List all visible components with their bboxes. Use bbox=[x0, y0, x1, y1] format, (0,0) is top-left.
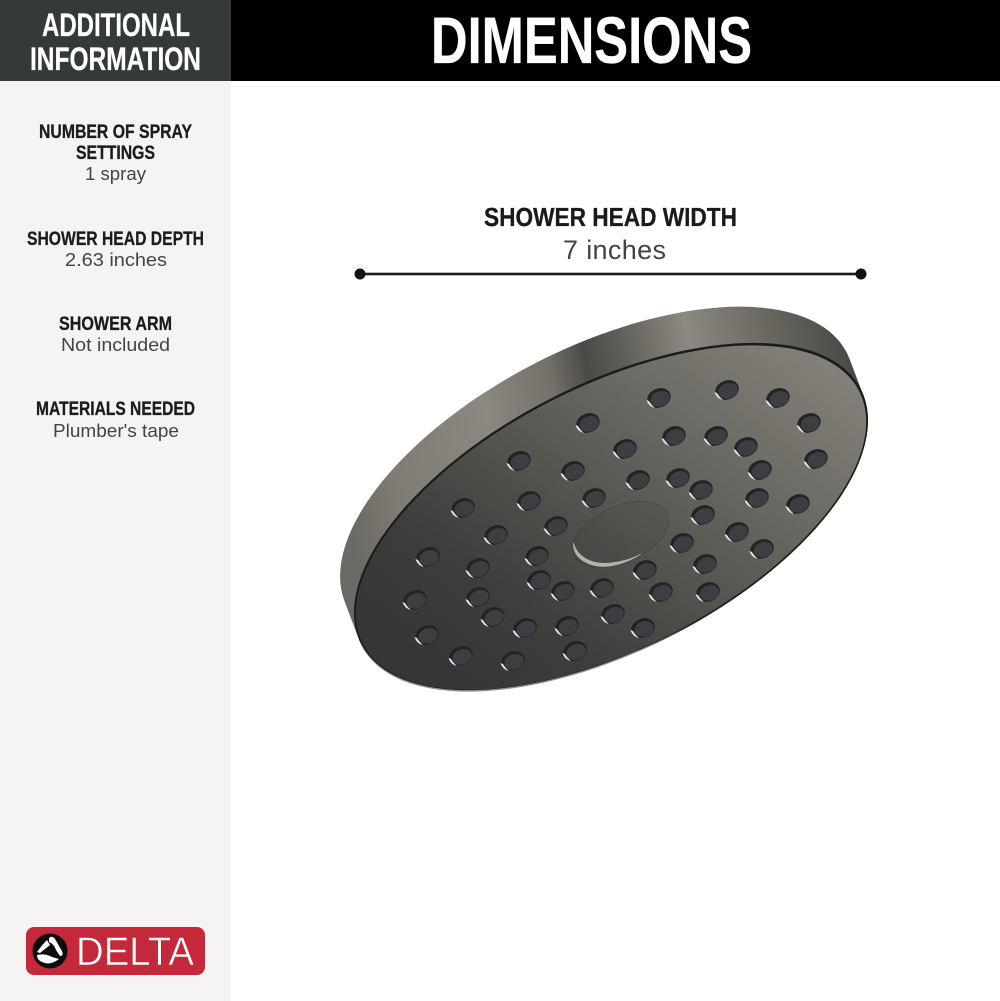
spec: materials needed bbox=[36, 398, 195, 441]
width measurement callout: 7 inches bbox=[563, 235, 666, 265]
spec: materials needed: Plumber's tape bbox=[53, 420, 179, 441]
logo: Delta bbox=[26, 927, 205, 975]
spec: number of spray settings: SETTINGS bbox=[76, 142, 155, 164]
logo: Delta: DELTA bbox=[76, 930, 194, 974]
heading bar: dimensions: DIMENSIONS bbox=[431, 3, 752, 77]
spec: shower head depth bbox=[27, 228, 204, 270]
sidebar heading: additional information: ADDITIONAL bbox=[42, 7, 190, 43]
sidebar heading: additional information: INFORMATION bbox=[30, 41, 201, 77]
spec: shower head depth: 2.63 inches bbox=[65, 249, 167, 270]
spray nozzles bbox=[400, 377, 831, 674]
width measurement callout bbox=[354, 202, 866, 280]
heading bar: dimensions bbox=[231, 0, 1000, 81]
width measurement callout: SHOWER HEAD WIDTH bbox=[484, 202, 737, 232]
center disc bbox=[563, 488, 678, 581]
spec: shower arm bbox=[59, 313, 172, 355]
dimension line bbox=[354, 268, 866, 280]
spec: shower head depth: SHOWER HEAD DEPTH bbox=[27, 228, 204, 250]
shower head face bbox=[303, 274, 919, 761]
spec: number of spray settings: NUMBER OF SPRAY bbox=[39, 121, 192, 143]
panel: additional information sidebar bbox=[0, 0, 231, 1001]
rim line bbox=[301, 271, 921, 762]
spec: number of spray settings bbox=[39, 121, 192, 184]
spec: shower arm: Not included bbox=[61, 334, 170, 355]
sidebar heading: additional information bbox=[0, 0, 231, 81]
spec: shower arm: SHOWER ARM bbox=[59, 313, 172, 335]
spec: materials needed: MATERIALS NEEDED bbox=[36, 398, 195, 420]
spec: number of spray settings: 1 spray bbox=[85, 163, 147, 184]
shower head illustration bbox=[301, 271, 921, 763]
bottom rim highlight bbox=[302, 274, 920, 763]
shower head body bbox=[340, 307, 868, 690]
